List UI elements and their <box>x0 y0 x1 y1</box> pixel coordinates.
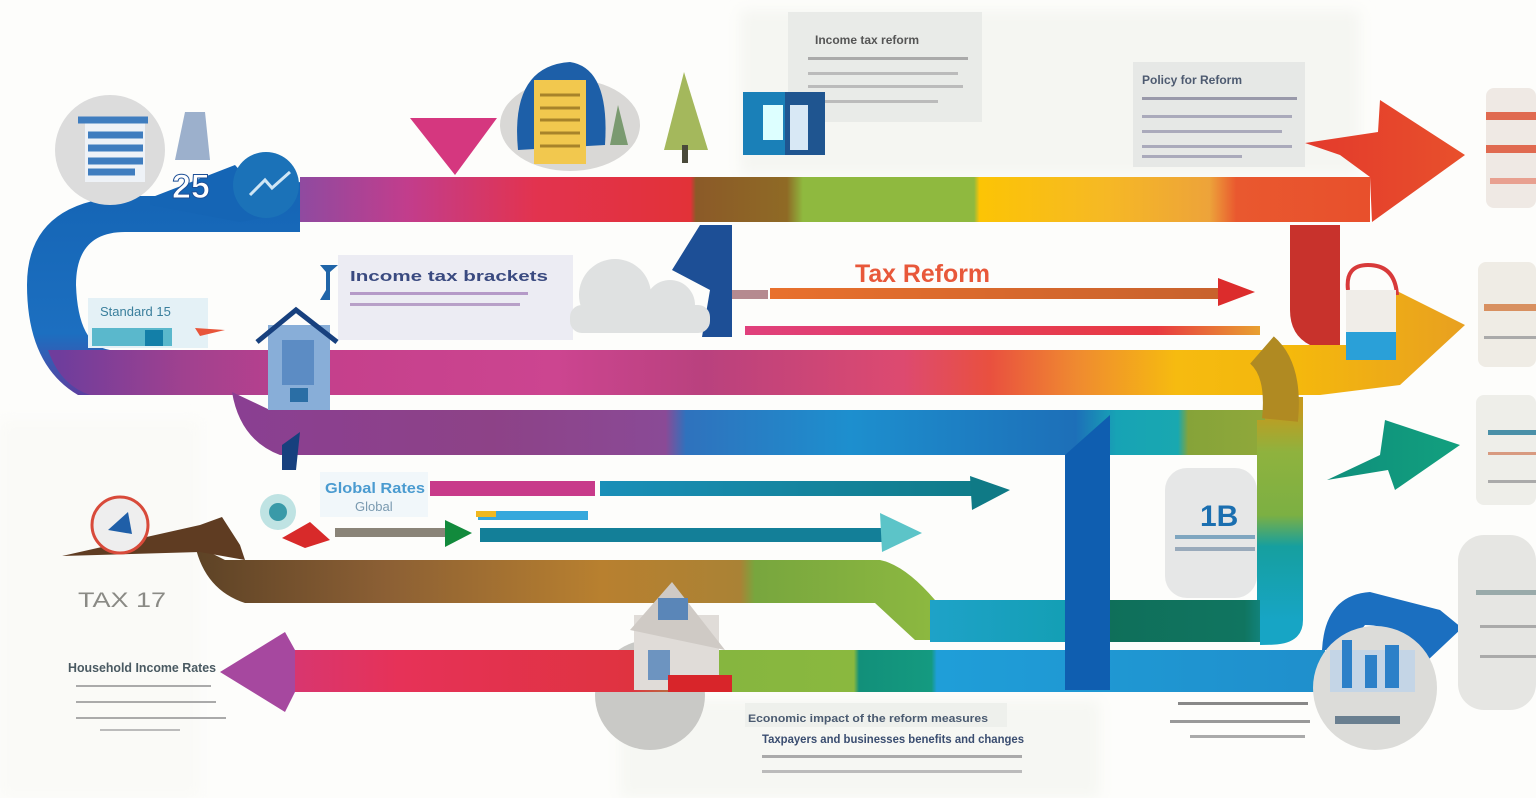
panel: cloud text small: Global <box>355 499 393 514</box>
icon: blue badge <box>150 112 299 222</box>
icon: chart circle bottom right <box>1313 626 1437 750</box>
icon: tree <box>664 72 708 163</box>
red arrow top right <box>1305 100 1465 222</box>
panel: number callout <box>1165 468 1257 598</box>
panel: bottom centre text: Taxpayers and businesses benefits and changes <box>762 732 1024 746</box>
icon: small globe <box>260 494 296 530</box>
icon: house blue <box>257 310 337 410</box>
icon: target left <box>92 497 148 553</box>
panel: top right text: Policy for Reform <box>1142 73 1242 87</box>
panel: top right text <box>1133 62 1305 167</box>
green teal right vertical curve <box>1260 420 1280 622</box>
band 4b: teal segment <box>930 600 1260 642</box>
arrow: teal second <box>476 511 922 552</box>
arrow: pink teal <box>430 476 1010 510</box>
blue left curve band <box>27 182 300 395</box>
panel: number callout: 1B <box>1200 500 1238 533</box>
yellow arrow <box>1270 290 1465 395</box>
icon: building centre bottom <box>630 582 732 692</box>
brown branch left <box>62 517 245 560</box>
icon: tag right <box>1346 265 1397 360</box>
panel: right edge orange <box>1478 262 1536 367</box>
icon: clipboard circle left <box>55 95 165 205</box>
panel: cloud text small: Global Rates <box>325 480 425 497</box>
panel: bottom centre text <box>745 703 1024 773</box>
band 5: bottom ribbon <box>295 650 1325 692</box>
teal arrow right <box>1327 420 1460 490</box>
blue vertical centre piece <box>672 225 732 337</box>
arrow: pink thin <box>745 326 1260 335</box>
icon: pin lower <box>282 432 300 470</box>
panel: top centre text: Income tax reform <box>815 33 919 47</box>
red connector down <box>1290 225 1340 345</box>
panel: centre left text: Income tax brackets <box>350 268 548 285</box>
panel: right edge grey <box>1458 535 1536 710</box>
icon: blue pin <box>320 265 338 300</box>
purple left arrow <box>220 632 295 712</box>
panel: left blue label <box>88 298 225 348</box>
icon: cloud <box>570 259 710 333</box>
icon: blue square <box>743 92 825 155</box>
panel: bottom left text: Household Income Rates <box>68 660 216 675</box>
text: small notes beside chart <box>1170 702 1310 738</box>
panel: right edge teal <box>1476 395 1536 505</box>
icon: document circle top <box>500 62 640 171</box>
panel: top centre text <box>788 12 982 122</box>
blue curved arrow bottom right <box>1322 592 1462 660</box>
panel: bottom centre text: Economic impact of the reform measures <box>748 713 988 725</box>
band 2: middle ribbon <box>48 350 1290 395</box>
olive connector <box>1262 350 1281 420</box>
band 1: top ribbon <box>300 177 1370 222</box>
panel: centre left text <box>338 255 573 340</box>
panel: cloud text small <box>320 472 428 517</box>
panel: right edge red <box>1486 88 1536 208</box>
grey disc below building <box>595 640 705 750</box>
panel: left blue label: Standard 15 <box>100 304 171 319</box>
heading: Tax Reform: Tax Reform <box>855 260 990 288</box>
icon: blue badge: 25 <box>172 168 210 206</box>
arrow: orange thin <box>732 278 1255 306</box>
band 4: brown green ribbon <box>195 545 935 640</box>
band 3: ribbon <box>232 392 1270 455</box>
blue vertical connector <box>1065 415 1110 690</box>
pink triangle <box>410 118 497 175</box>
arrow: small green red <box>282 520 472 548</box>
label: lower left: TAX 17 <box>78 589 166 612</box>
